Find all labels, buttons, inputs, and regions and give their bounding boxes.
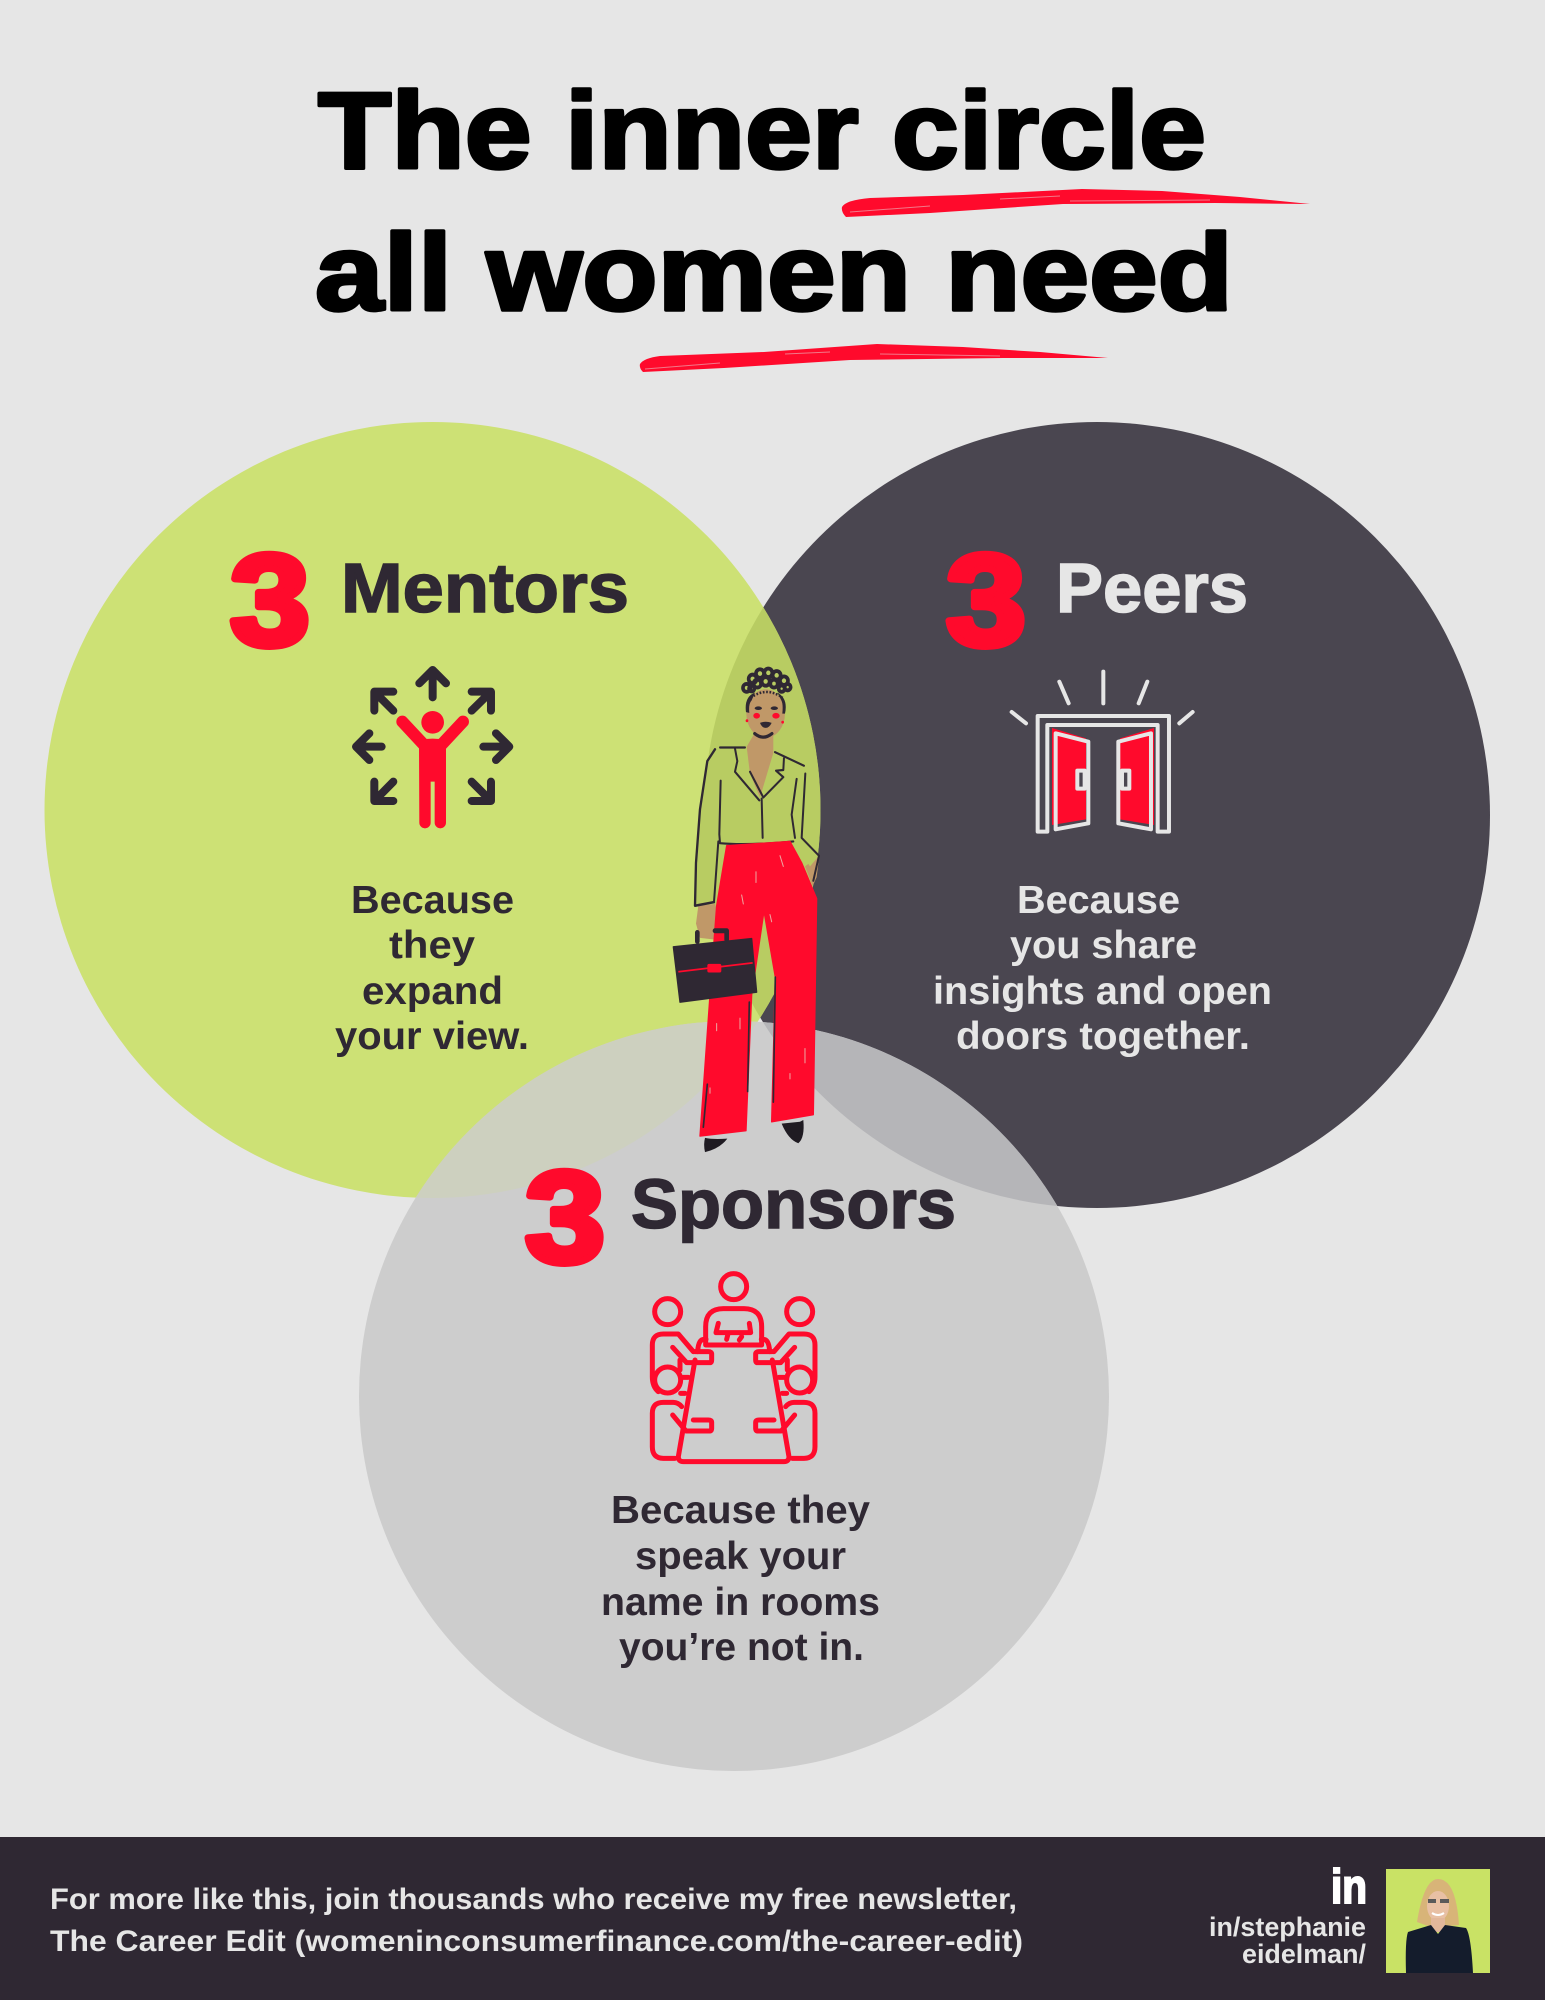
number 3 mentors: 3 [230, 527, 310, 673]
text: sponsors reason [601, 1489, 880, 1669]
icon: linkedin: in [1331, 1861, 1367, 1914]
title: The inner circle [318, 70, 1206, 192]
author portrait [1386, 1869, 1490, 1973]
text: sponsors reason: you’re not in. [619, 1626, 864, 1669]
text: mentors reason: expand [362, 970, 503, 1013]
footer newsletter text: The Career Edit (womeninconsumerfinance.com/the-career-edit) [50, 1925, 1023, 1958]
text: mentors reason [335, 879, 529, 1058]
panel: mentors [230, 527, 629, 1058]
text: mentors reason: your view. [335, 1015, 529, 1058]
text: mentors reason: Because [351, 879, 514, 922]
text: peers reason [933, 879, 1272, 1058]
icon: open doors [1012, 672, 1193, 832]
text: sponsors reason: name in rooms [601, 1581, 880, 1624]
linkedin handle: in/stephanie [1209, 1912, 1366, 1942]
number 3 sponsors: 3 [525, 1144, 605, 1290]
footer newsletter text [50, 1883, 1023, 1958]
heading: mentors: Mentors [341, 549, 629, 627]
illustration: woman with briefcase [673, 669, 819, 1152]
title [315, 70, 1233, 334]
footer newsletter text: For more like this, join thousands who receive my free newsletter, [50, 1883, 1017, 1916]
linkedin handle [1209, 1912, 1366, 1969]
text: mentors reason: they [389, 924, 475, 967]
footer bar [0, 1837, 1545, 2000]
venn diagram [44, 422, 1490, 1771]
heading: peers: Peers [1056, 549, 1248, 627]
panel: sponsors [525, 1144, 956, 1669]
linkedin handle: eidelman/ [1242, 1939, 1366, 1969]
number 3 peers: 3 [946, 527, 1026, 673]
text: peers reason: you share [1010, 924, 1197, 967]
panel: peers [933, 527, 1272, 1058]
icon: boardroom meeting [652, 1274, 815, 1462]
text: peers reason: insights and open [933, 970, 1272, 1013]
title underline: circle [842, 189, 1310, 217]
text: sponsors reason: speak your [635, 1535, 846, 1578]
text: peers reason: Because [1017, 879, 1180, 922]
icon: person with arrows [356, 670, 509, 828]
heading: sponsors: Sponsors [631, 1165, 956, 1243]
text: sponsors reason: Because they [611, 1489, 870, 1532]
title underline: need [640, 344, 1108, 372]
title: all women need [315, 212, 1233, 334]
text: peers reason: doors together. [956, 1015, 1250, 1058]
